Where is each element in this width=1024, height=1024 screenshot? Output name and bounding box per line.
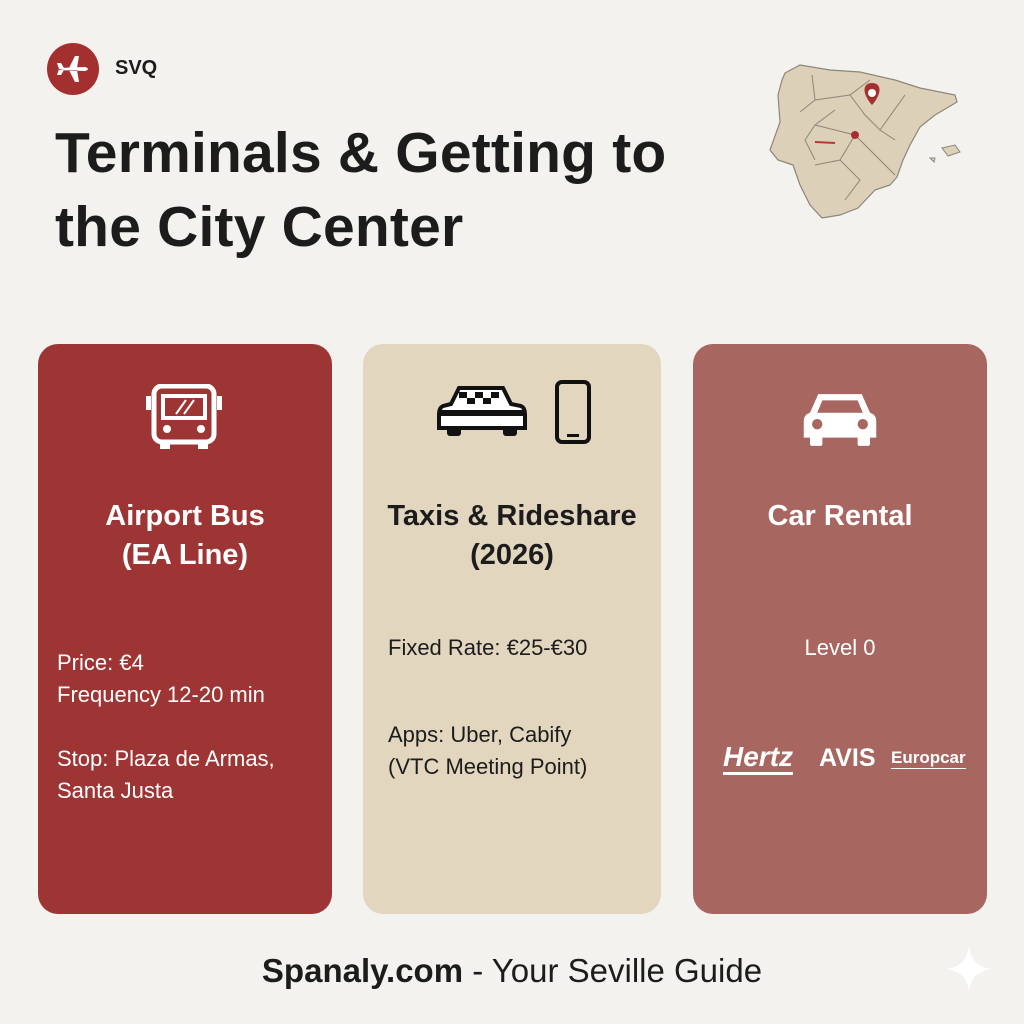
text: taxi details: Fixed Rate: €25-€30 [388,635,587,660]
panel: taxis [363,344,661,914]
panel: taxis: (VTC Meeting Point) [388,754,587,779]
brand logos: Hertz [723,741,793,772]
text: bus details: Stop: Plaza de Armas, [57,746,275,771]
icon: bus [146,384,222,449]
text: bus details: Santa Justa [57,778,173,803]
brand logos: AVIS [819,744,876,772]
heading: (EA Line) [122,539,248,571]
logo: plane badge: SVQ [115,57,157,79]
panel: airport bus [38,344,332,914]
heading [387,500,637,571]
title: Terminals & Getting to [55,121,666,185]
footer: Spanaly.com - Your Seville Guide [262,952,762,989]
icon: car [804,394,876,446]
text: bus details [57,650,275,803]
heading [105,500,265,571]
panel: car rental [693,344,987,914]
text: bus details: Price: €4 [57,650,144,675]
icon: taxi and phone [437,380,591,444]
text: bus details: Frequency 12-20 min [57,682,265,707]
heading: Car Rental [767,500,913,532]
sparkle icon [948,948,990,990]
title [55,121,666,259]
brand logos [723,741,966,775]
map of Spain [769,64,961,219]
heading: (2026) [470,539,554,571]
panel: taxis: Apps: Uber, Cabify [388,722,571,747]
logo: plane badge [47,43,157,95]
title: the City Center [55,195,463,259]
brand logos: Europcar [891,748,966,767]
heading: Taxis & Rideshare [387,500,637,532]
text: level: Level 0 [805,635,875,660]
heading: Airport Bus [105,500,265,532]
